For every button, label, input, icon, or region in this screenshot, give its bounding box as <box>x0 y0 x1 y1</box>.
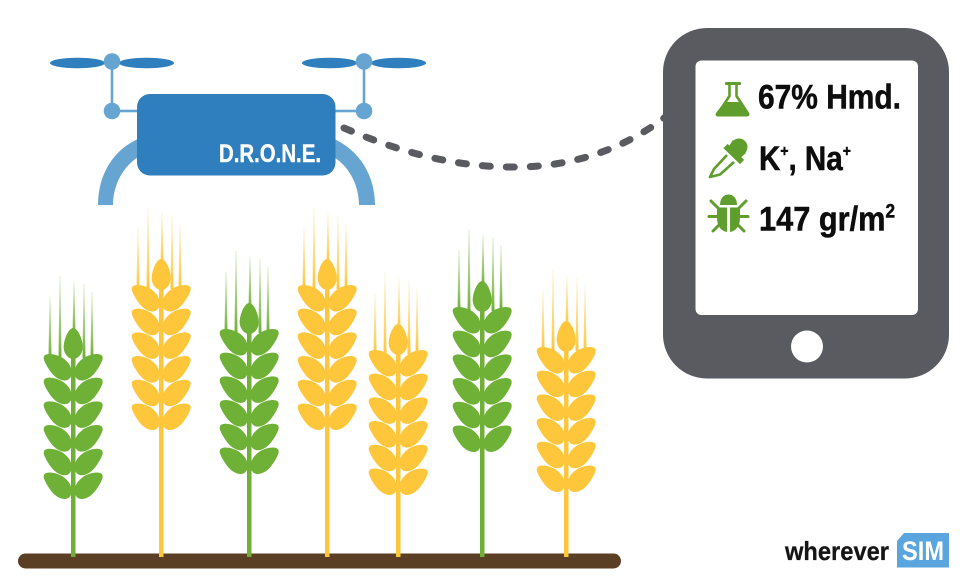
icon: bug <box>709 194 748 232</box>
wheat stalk 3: green <box>220 251 279 557</box>
humidity reading: 67% Hmd. <box>758 78 901 116</box>
drone label: D.R.O.N.E. <box>219 140 321 168</box>
icon: dropper <box>710 138 748 177</box>
ground <box>18 554 621 568</box>
drone landing legs <box>98 138 375 205</box>
tablet home button <box>791 330 823 362</box>
logo SIM text: SIM <box>902 536 944 566</box>
drone arms <box>104 61 372 119</box>
dashed data link arrow <box>344 118 664 167</box>
drone body <box>137 94 336 176</box>
biomass reading: 147 gr/m <box>759 200 885 238</box>
wheat stalk 1: green <box>44 276 103 557</box>
logo SIM card badge <box>897 533 949 568</box>
logo: wherever SIM <box>784 533 949 568</box>
potassium and sodium reading: K <box>759 139 780 177</box>
left rotor <box>50 53 174 70</box>
logo wordmark: wherever <box>784 536 889 566</box>
potassium and sodium reading: , Na <box>789 139 843 177</box>
wheat stalk 2: yellow <box>132 207 191 557</box>
right rotor <box>302 53 426 70</box>
wheat stalk 6: green <box>453 229 512 557</box>
wheat stalk 5: yellow <box>369 272 428 557</box>
tablet <box>663 28 949 378</box>
tablet frame <box>663 28 949 378</box>
icon: flask <box>716 82 749 116</box>
wheat stalk 7: yellow <box>537 269 596 557</box>
drone <box>50 53 426 205</box>
biomass reading: 2 <box>885 201 895 222</box>
potassium and sodium reading: + <box>780 142 789 160</box>
tablet screen <box>696 60 918 315</box>
potassium and sodium reading: + <box>843 142 851 160</box>
wheat stalk 4: yellow <box>298 207 357 557</box>
